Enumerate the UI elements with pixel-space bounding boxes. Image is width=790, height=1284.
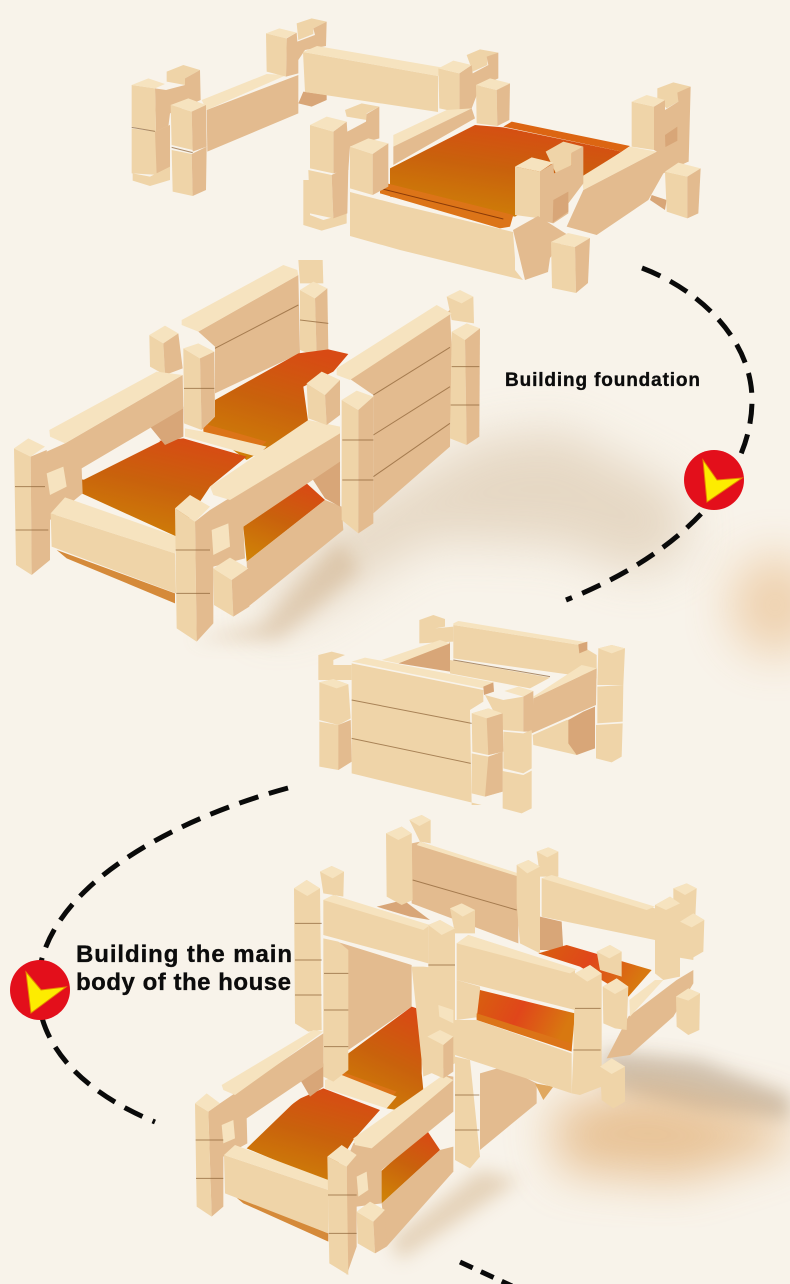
block group: main body assembly xyxy=(195,815,704,1275)
dashed path: foundation xyxy=(566,268,752,600)
background shadows xyxy=(190,430,790,1260)
icon: red arrow marker right xyxy=(684,450,744,510)
caption: building foundation: Building foundation xyxy=(505,370,700,391)
front glass xyxy=(82,438,247,537)
block group: foundation tray right part xyxy=(380,49,701,235)
block group: long beam xyxy=(303,46,445,112)
dashed path: main body xyxy=(38,788,288,1122)
caption: building the main body: body of the house xyxy=(76,969,291,996)
rear glass xyxy=(203,349,348,460)
caption: building the main body: Building the main xyxy=(76,941,292,968)
icon: red arrow marker left xyxy=(10,960,70,1020)
block group: wall module floating xyxy=(318,615,625,813)
block group: foundation chair assembly xyxy=(14,260,480,642)
dashed path: next step xyxy=(460,1262,512,1284)
block group: loose fence pieces xyxy=(132,18,327,196)
block group: foundation tray left part xyxy=(303,103,388,231)
side glass xyxy=(243,483,325,562)
rear right glass xyxy=(538,945,652,997)
block group: tray front beam xyxy=(350,192,590,293)
glass panel xyxy=(503,122,630,152)
lower glass xyxy=(247,1088,380,1182)
middle tray glass xyxy=(477,990,575,1050)
